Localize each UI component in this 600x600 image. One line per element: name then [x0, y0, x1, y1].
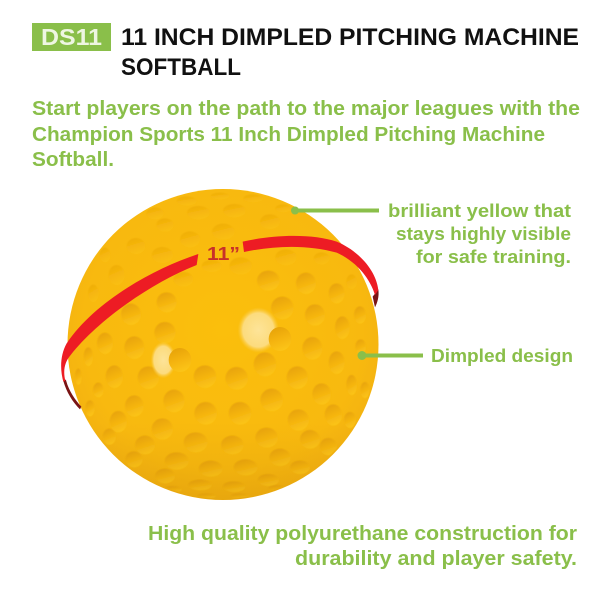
construction note: [148, 523, 577, 570]
callout: brilliant yellow: for safe training.: [416, 247, 571, 267]
construction note: High quality polyurethane construction for: [148, 523, 577, 545]
intro text: Start players on the path to the major leagues with the: [32, 98, 580, 120]
title: 11 INCH DIMPLED PITCHING MACHINE: [121, 24, 579, 51]
callout: dimpled design: Dimpled design: [431, 346, 573, 366]
title: SOFTBALL: [121, 54, 241, 81]
intro text: [32, 98, 580, 171]
intro text: Champion Sports 11 Inch Dimpled Pitching Machine: [32, 124, 545, 146]
softball illustration: [61, 189, 379, 500]
highlights: [151, 307, 291, 378]
callout: dimpled design: [358, 346, 573, 366]
label: 11 inch: 11”: [207, 244, 240, 264]
lower shading: [68, 189, 378, 500]
badge: DS11: DS11: [41, 24, 102, 50]
callout: brilliant yellow: brilliant yellow that: [388, 201, 571, 221]
measuring band: [61, 236, 379, 409]
callout: brilliant yellow: stays highly visible: [396, 224, 571, 244]
intro text: Softball.: [32, 149, 114, 171]
ball body: [68, 189, 378, 500]
construction note: durability and player safety.: [295, 548, 577, 570]
callout: brilliant yellow: [291, 201, 571, 267]
title: [121, 24, 579, 81]
dimples: [75, 193, 370, 499]
badge: DS11: [32, 23, 111, 51]
